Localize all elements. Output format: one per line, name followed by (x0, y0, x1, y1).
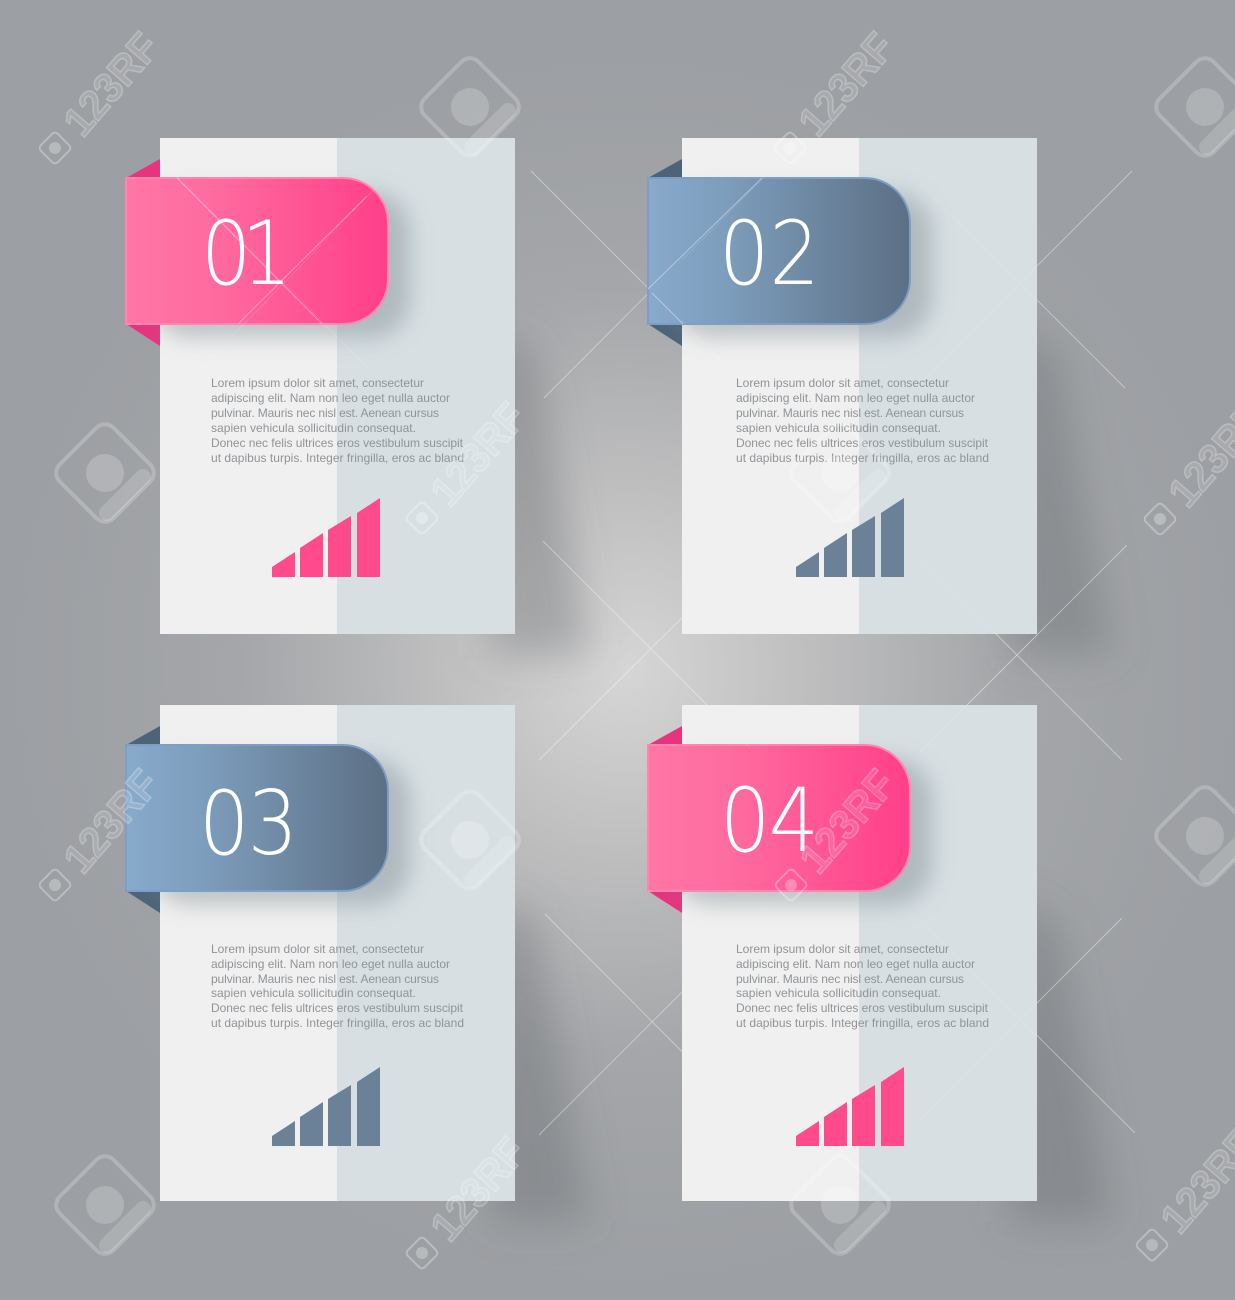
card 03 ribbon fold (126, 726, 160, 913)
card 02 body text: Lorem ipsum dolor sit amet, consectetur (736, 376, 949, 390)
card 04 ribbon shadow (672, 759, 932, 905)
watermark: 123RF text logos: 123RF (790, 760, 904, 882)
card 01 body text: Lorem ipsum dolor sit amet, consectetur (211, 376, 424, 390)
watermark: 123RF text logos: 123RF (421, 393, 535, 515)
card 04 ribbon fold (648, 726, 682, 913)
card 02 body text: ut dapibus turpis. Integer fringilla, eros ac bland (736, 451, 989, 465)
card 02 ribbon (648, 178, 910, 324)
card 04 body text: ut dapibus turpis. Integer fringilla, eros ac bland (736, 1016, 989, 1030)
card 03 body text (211, 942, 464, 1030)
card 03 ribbon shadow (150, 759, 410, 905)
card 01 bar icon (272, 498, 380, 577)
card 01 ribbon (126, 178, 388, 324)
panel: card 04 (648, 705, 1037, 1201)
card 04 body text: pulvinar. Mauris nec nisl est. Aenean cursus (736, 972, 964, 986)
card 02 body text: Donec nec felis ultrices eros vestibulum suscipit (736, 436, 989, 450)
card 02 body text (736, 376, 989, 465)
panel: card 01 (126, 138, 515, 634)
card 01 body text: pulvinar. Mauris nec nisl est. Aenean cursus (211, 406, 439, 420)
card 01 ribbon fold (126, 159, 160, 346)
card 02 body text: adipiscing elit. Nam non leo eget nulla auctor (736, 391, 975, 405)
card 03 body text: Donec nec felis ultrices eros vestibulum suscipit (211, 1001, 464, 1015)
card 04 number: 04 (720, 769, 817, 872)
card 03 ribbon (126, 745, 388, 891)
watermark: 123RF text logos: 123RF (54, 760, 168, 882)
card 02 ribbon fold (648, 159, 682, 346)
card shadows (490, 330, 1112, 1222)
card 04 body text: Donec nec felis ultrices eros vestibulum suscipit (736, 1001, 989, 1015)
watermark: 123RF text logos: 123RF (789, 23, 903, 145)
card 02 sheet (682, 138, 1037, 634)
card 01 body text: adipiscing elit. Nam non leo eget nulla auctor (211, 391, 450, 405)
card 04 sheet (682, 705, 1037, 1201)
card 03 sheet (160, 705, 515, 1201)
card 04 body text: adipiscing elit. Nam non leo eget nulla auctor (736, 957, 975, 971)
card 03 body text: Lorem ipsum dolor sit amet, consectetur (211, 942, 424, 956)
card 01 body text: sapien vehicula sollicitudin consequat. (211, 421, 416, 435)
watermark: 123RF text logos: 123RF (54, 23, 168, 145)
card 01 number: 01 (201, 202, 283, 305)
card 02 ribbon shadow (672, 192, 932, 338)
card 03 body text: sapien vehicula sollicitudin consequat. (211, 986, 416, 1000)
card 03 bar icon (272, 1067, 380, 1146)
card 01 sheet (160, 138, 515, 634)
card 03 body text: ut dapibus turpis. Integer fringilla, eros ac bland (211, 1016, 464, 1030)
watermark: 123RF text logos: 123RF (421, 1128, 535, 1250)
panel: card 03 (126, 705, 515, 1201)
card 02 number: 02 (719, 202, 820, 305)
card 02 bar icon (796, 498, 904, 577)
card 03 number: 03 (199, 772, 296, 875)
card 01 body text (211, 376, 464, 465)
card 04 body text (736, 942, 989, 1030)
card 04 body text: Lorem ipsum dolor sit amet, consectetur (736, 942, 949, 956)
card 04 bar icon (796, 1067, 904, 1146)
card 02 body text: pulvinar. Mauris nec nisl est. Aenean cursus (736, 406, 964, 420)
panel: card 02 (648, 138, 1037, 634)
card 01 body text: ut dapibus turpis. Integer fringilla, eros ac bland (211, 451, 464, 465)
card 01 ribbon shadow (150, 192, 410, 338)
card 03 body text: adipiscing elit. Nam non leo eget nulla auctor (211, 957, 450, 971)
card 03 body text: pulvinar. Mauris nec nisl est. Aenean cursus (211, 972, 439, 986)
card 02 body text: sapien vehicula sollicitudin consequat. (736, 421, 941, 435)
card 04 ribbon (648, 745, 910, 891)
card 01 body text: Donec nec felis ultrices eros vestibulum suscipit (211, 436, 464, 450)
card 04 body text: sapien vehicula sollicitudin consequat. (736, 986, 941, 1000)
